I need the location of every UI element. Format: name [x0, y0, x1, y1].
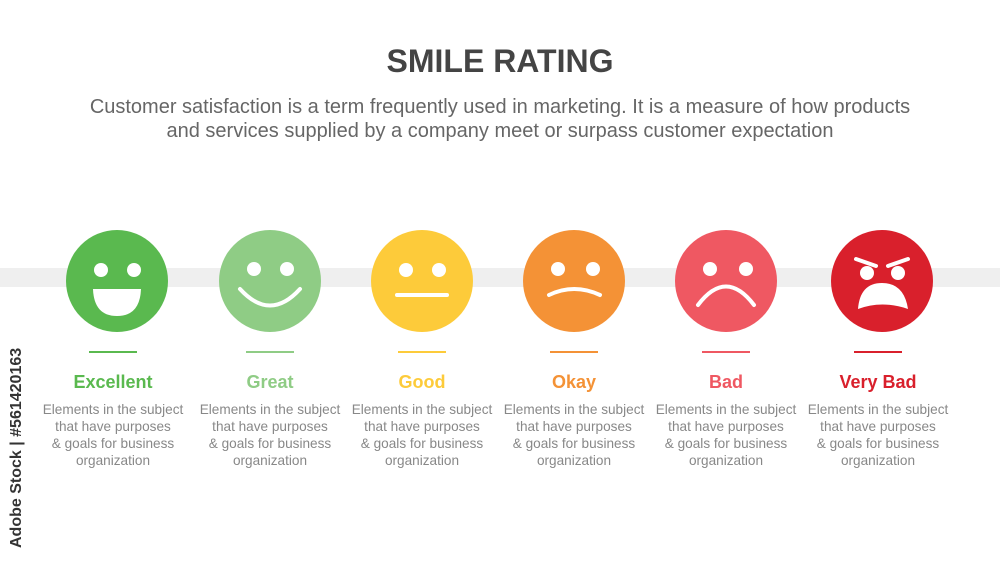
column: good: that have purposes — [364, 419, 480, 434]
column: excellent: Elements in the subject — [43, 402, 183, 417]
column: very bad: that have purposes — [820, 419, 936, 434]
column: okay: Elements in the subject — [504, 402, 644, 417]
icon: good face — [371, 230, 473, 332]
column: very bad: Elements in the subject — [808, 402, 948, 417]
column: very bad: Very Bad — [839, 372, 917, 392]
column: good: organization — [385, 453, 459, 468]
column: bad: Bad — [709, 372, 743, 392]
icon: excellent face — [66, 230, 168, 332]
column: great: Great — [246, 372, 294, 392]
column: bad — [656, 351, 796, 468]
column: excellent — [43, 351, 184, 468]
column: excellent: organization — [76, 453, 150, 468]
column: excellent: that have purposes — [55, 419, 171, 434]
column: good: & goals for business — [361, 436, 483, 451]
column: great: Elements in the subject — [200, 402, 340, 417]
faces row — [0, 230, 1000, 332]
column: bad: & goals for business — [665, 436, 787, 451]
column: good: Elements in the subject — [352, 402, 492, 417]
column: great: organization — [233, 453, 307, 468]
icon: great face — [219, 230, 321, 332]
column: excellent: Excellent — [73, 372, 153, 392]
icon: okay face — [523, 230, 625, 332]
column: good: Good — [398, 372, 446, 392]
title: SMILE RATING — [387, 43, 613, 79]
icon: very bad face — [831, 230, 933, 332]
column: okay: that have purposes — [516, 419, 632, 434]
column: very bad — [808, 351, 948, 468]
column: bad: that have purposes — [668, 419, 784, 434]
subtitle — [90, 96, 910, 142]
column: bad: Elements in the subject — [656, 402, 796, 417]
icon: bad face — [675, 230, 777, 332]
column: great — [200, 351, 340, 468]
column: okay: & goals for business — [513, 436, 635, 451]
column: okay — [504, 351, 644, 468]
subtitle: Customer satisfaction is a term frequently used in marketing. It is a measure of how products — [90, 96, 910, 118]
column: great: that have purposes — [212, 419, 328, 434]
column: great: & goals for business — [209, 436, 331, 451]
subtitle: and services supplied by a company meet or surpass customer expectation — [166, 120, 834, 142]
column: very bad: organization — [841, 453, 915, 468]
column: very bad: & goals for business — [817, 436, 939, 451]
column: okay: Okay — [552, 372, 596, 392]
column: bad: organization — [689, 453, 763, 468]
watermark side text: Adobe Stock | #561420163 — [8, 348, 25, 548]
column: good — [352, 351, 492, 468]
column: excellent: & goals for business — [52, 436, 174, 451]
column: okay: organization — [537, 453, 611, 468]
